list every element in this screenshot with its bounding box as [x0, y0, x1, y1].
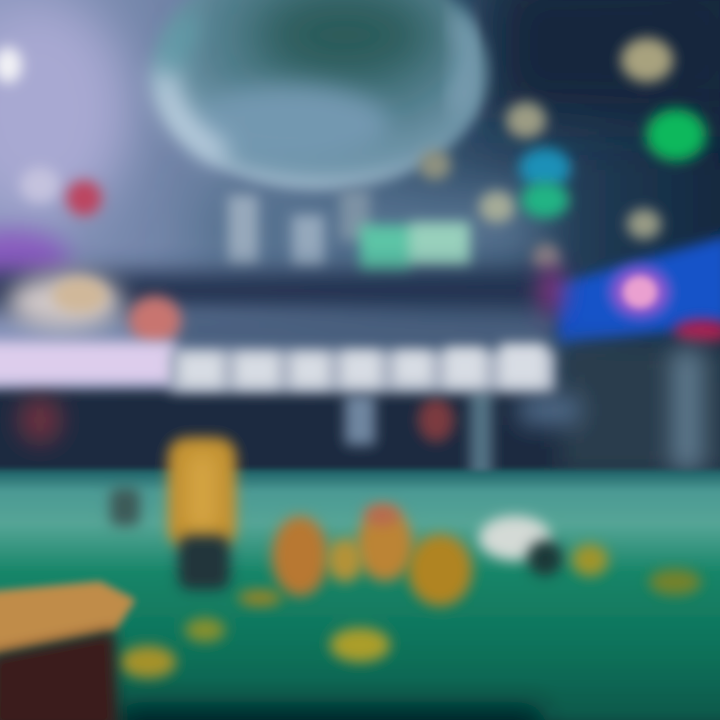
- tall coin stack: [168, 438, 236, 590]
- background wall: [0, 0, 720, 480]
- bokeh lights, upper left: [0, 47, 102, 216]
- mid grey-blue haze: [170, 312, 560, 352]
- lower dark band: [0, 345, 720, 490]
- coin pile: [272, 504, 608, 606]
- glowing white sign band: [0, 342, 555, 392]
- blurred chips, mid left: [7, 274, 181, 344]
- green table: [0, 470, 720, 720]
- dark band: [0, 272, 560, 312]
- dark shadow at bottom of table: [120, 706, 540, 720]
- small dark chip: [110, 488, 140, 526]
- wooden box: [0, 582, 135, 720]
- blurred sign lettering, upper row: [228, 190, 470, 273]
- neon screen, right: [540, 235, 720, 345]
- scattered coins: [120, 569, 701, 678]
- globe: [152, 0, 488, 190]
- bokeh lights, upper right: [419, 38, 706, 272]
